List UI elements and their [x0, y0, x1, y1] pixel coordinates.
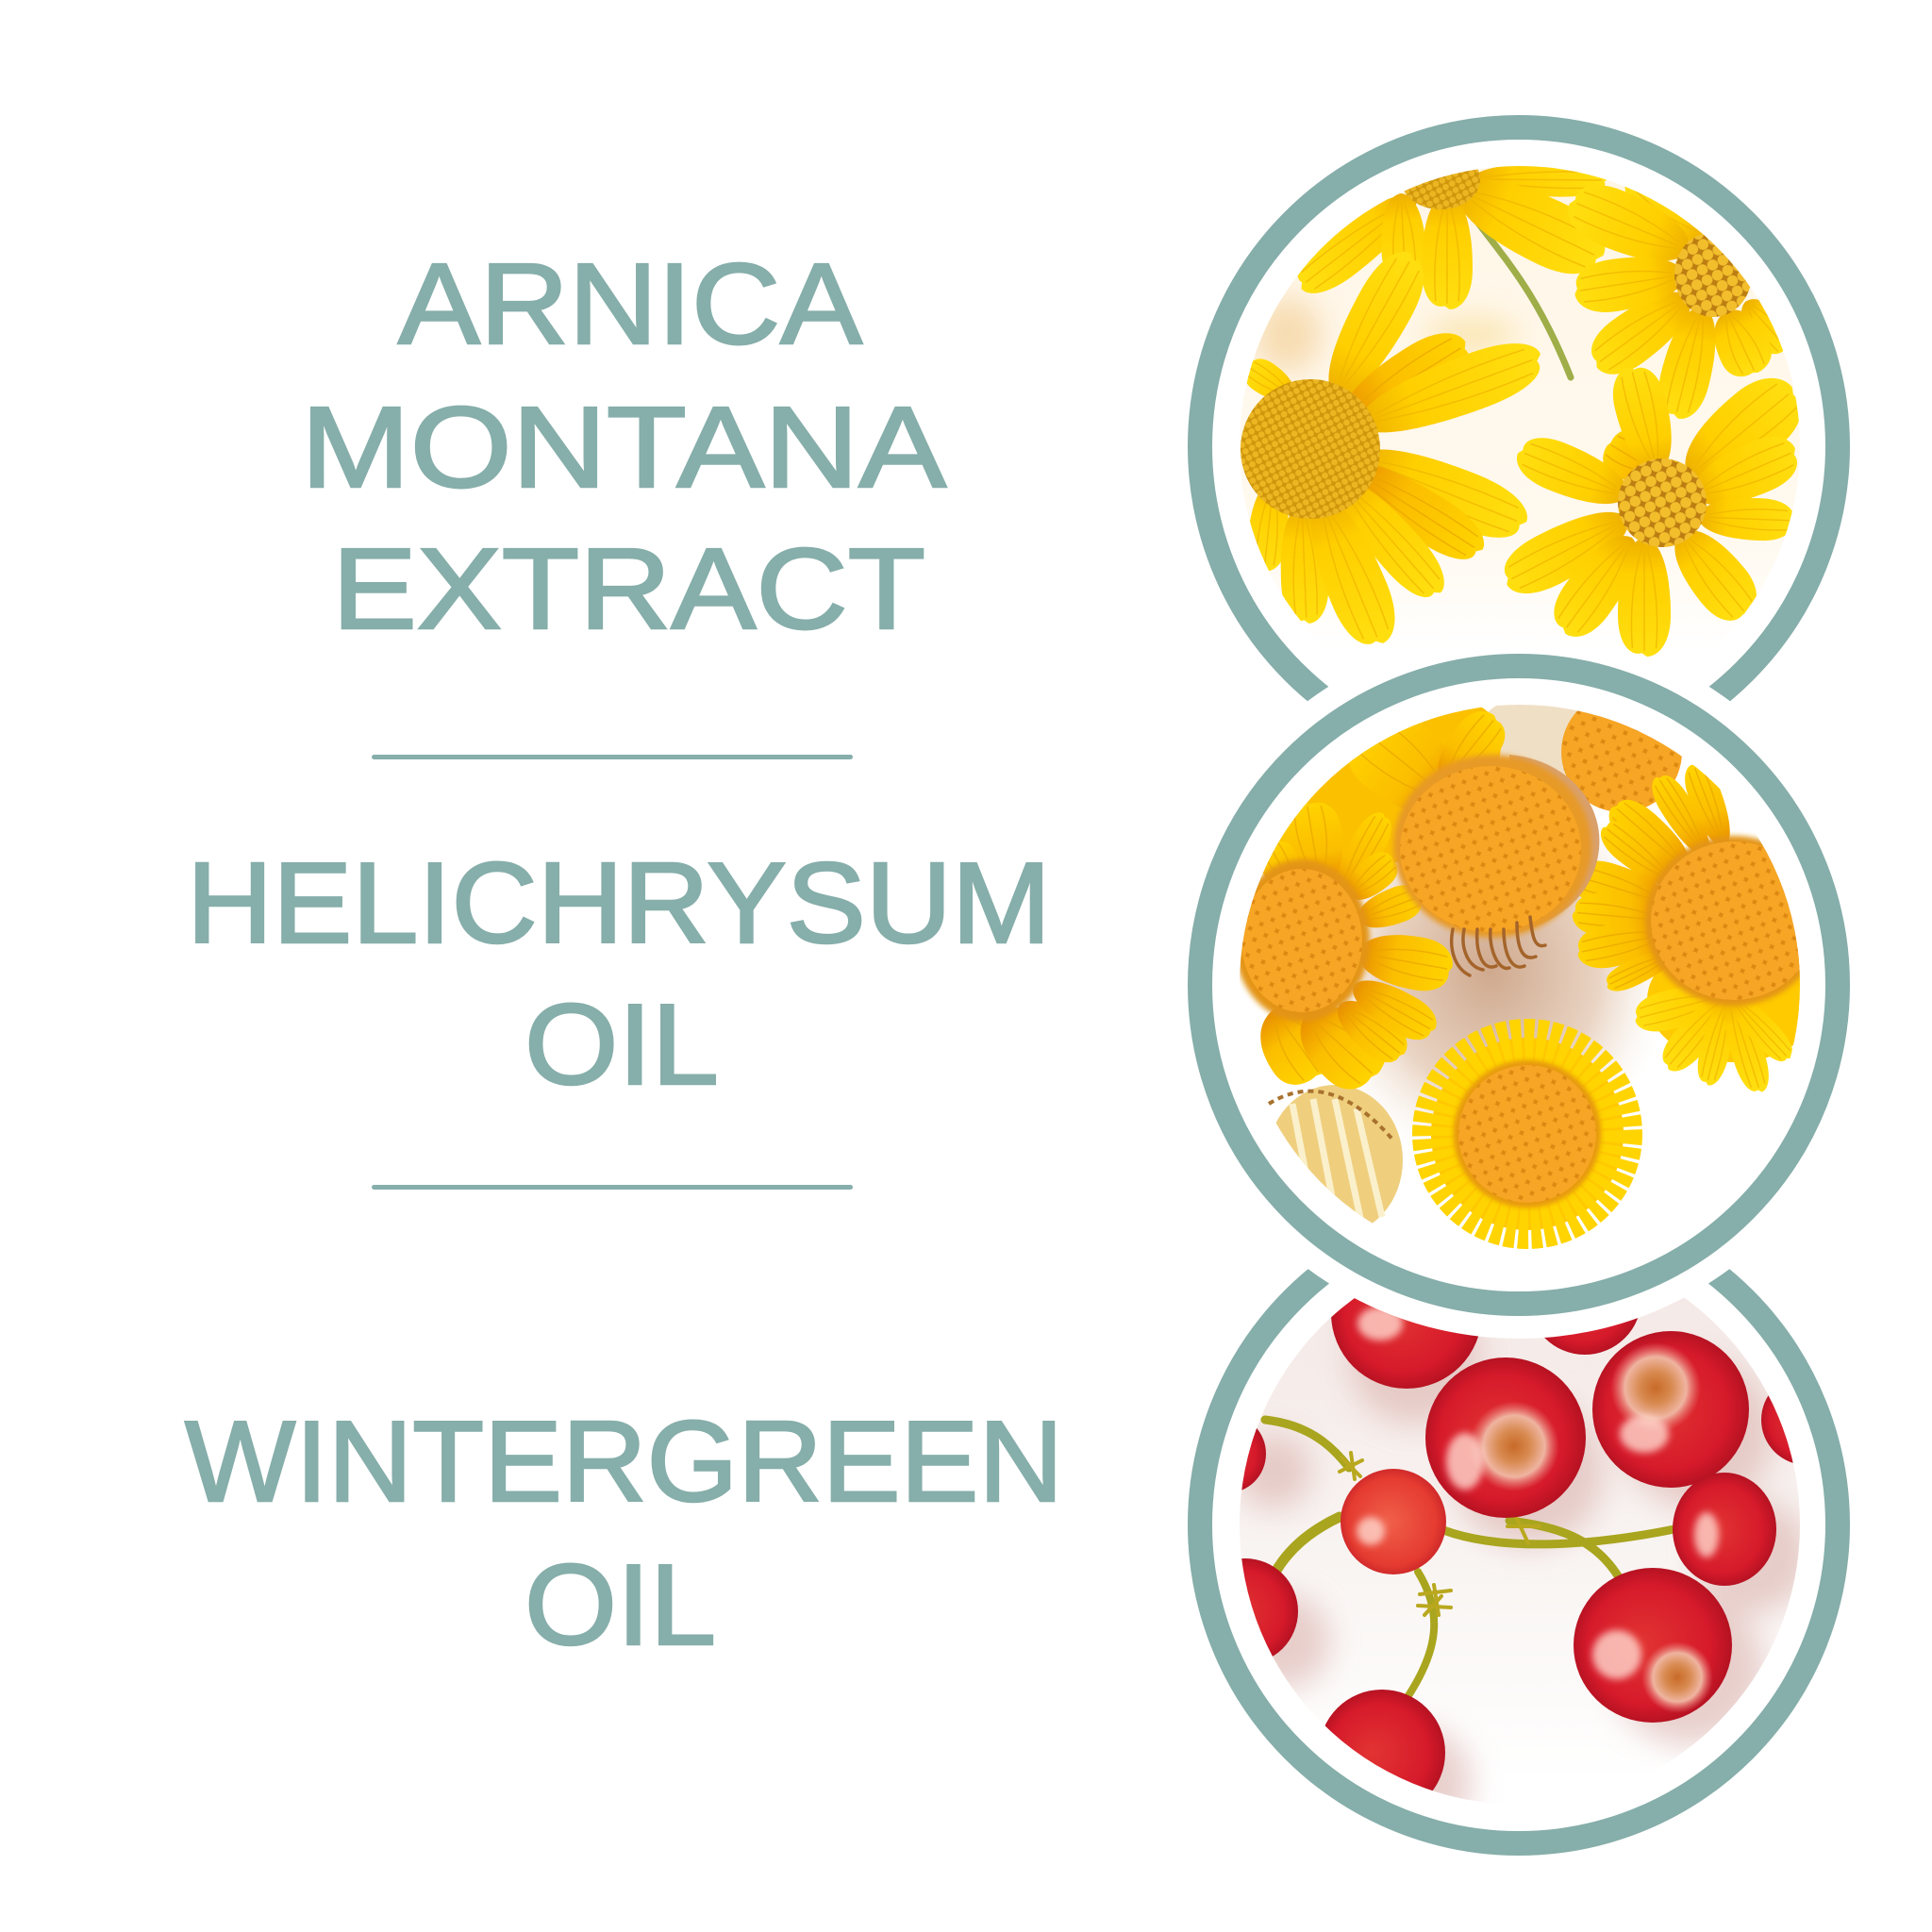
heading: Helichrysum Oil	[187, 839, 1051, 1108]
ring: top circle	[1200, 127, 1838, 765]
heading: Helichrysum Oil: OIL	[525, 980, 719, 1108]
stem	[1474, 225, 1574, 381]
ring: middle circle	[1200, 666, 1838, 1304]
soft shadows	[1255, 297, 1519, 373]
heading: Helichrysum Oil: HELICHRYSUM	[187, 839, 1051, 967]
flower: lower right	[1504, 368, 1799, 657]
berry spots	[1469, 1401, 1559, 1491]
flower: upper left petals	[1262, 708, 1506, 887]
photo: helichrysum flowers	[1240, 705, 1800, 1249]
flower: top right dried	[1561, 711, 1682, 811]
stems	[1265, 1420, 1674, 1700]
flower: bottom center	[1431, 1038, 1624, 1230]
flower: left	[1240, 853, 1453, 1090]
white gap around middle circle	[1165, 631, 1873, 1339]
flower: center dried	[1393, 755, 1599, 975]
ring: bottom circle	[1200, 1206, 1838, 1843]
heading: Arnica Montana Extract	[301, 240, 947, 653]
heading: Wintergreen Oil: WINTERGREEN	[185, 1397, 1063, 1525]
berry highlights	[1357, 1307, 1719, 1679]
flower: large left	[1238, 242, 1551, 656]
berry shadows	[1241, 1336, 1800, 1802]
curled strands	[1452, 917, 1545, 975]
flower: top	[1298, 166, 1607, 309]
flower: top right	[1569, 185, 1783, 419]
photo: wintergreen berries	[1240, 1298, 1800, 1802]
calyx details	[1340, 1453, 1540, 1615]
tan backdrop	[1347, 840, 1653, 1138]
flower: right	[1572, 764, 1800, 1092]
photo: arnica flowers	[1240, 166, 1800, 657]
flower: dried lower left	[1267, 1085, 1403, 1236]
heading: Wintergreen Oil	[185, 1397, 1063, 1669]
heading: Arnica Montana Extract: MONTANA	[301, 383, 947, 511]
heading: Wintergreen Oil: OIL	[525, 1541, 716, 1669]
heading: Arnica Montana Extract: ARNICA	[398, 240, 863, 368]
berries	[1331, 1298, 1479, 1389]
heading: Arnica Montana Extract: EXTRACT	[332, 525, 925, 653]
